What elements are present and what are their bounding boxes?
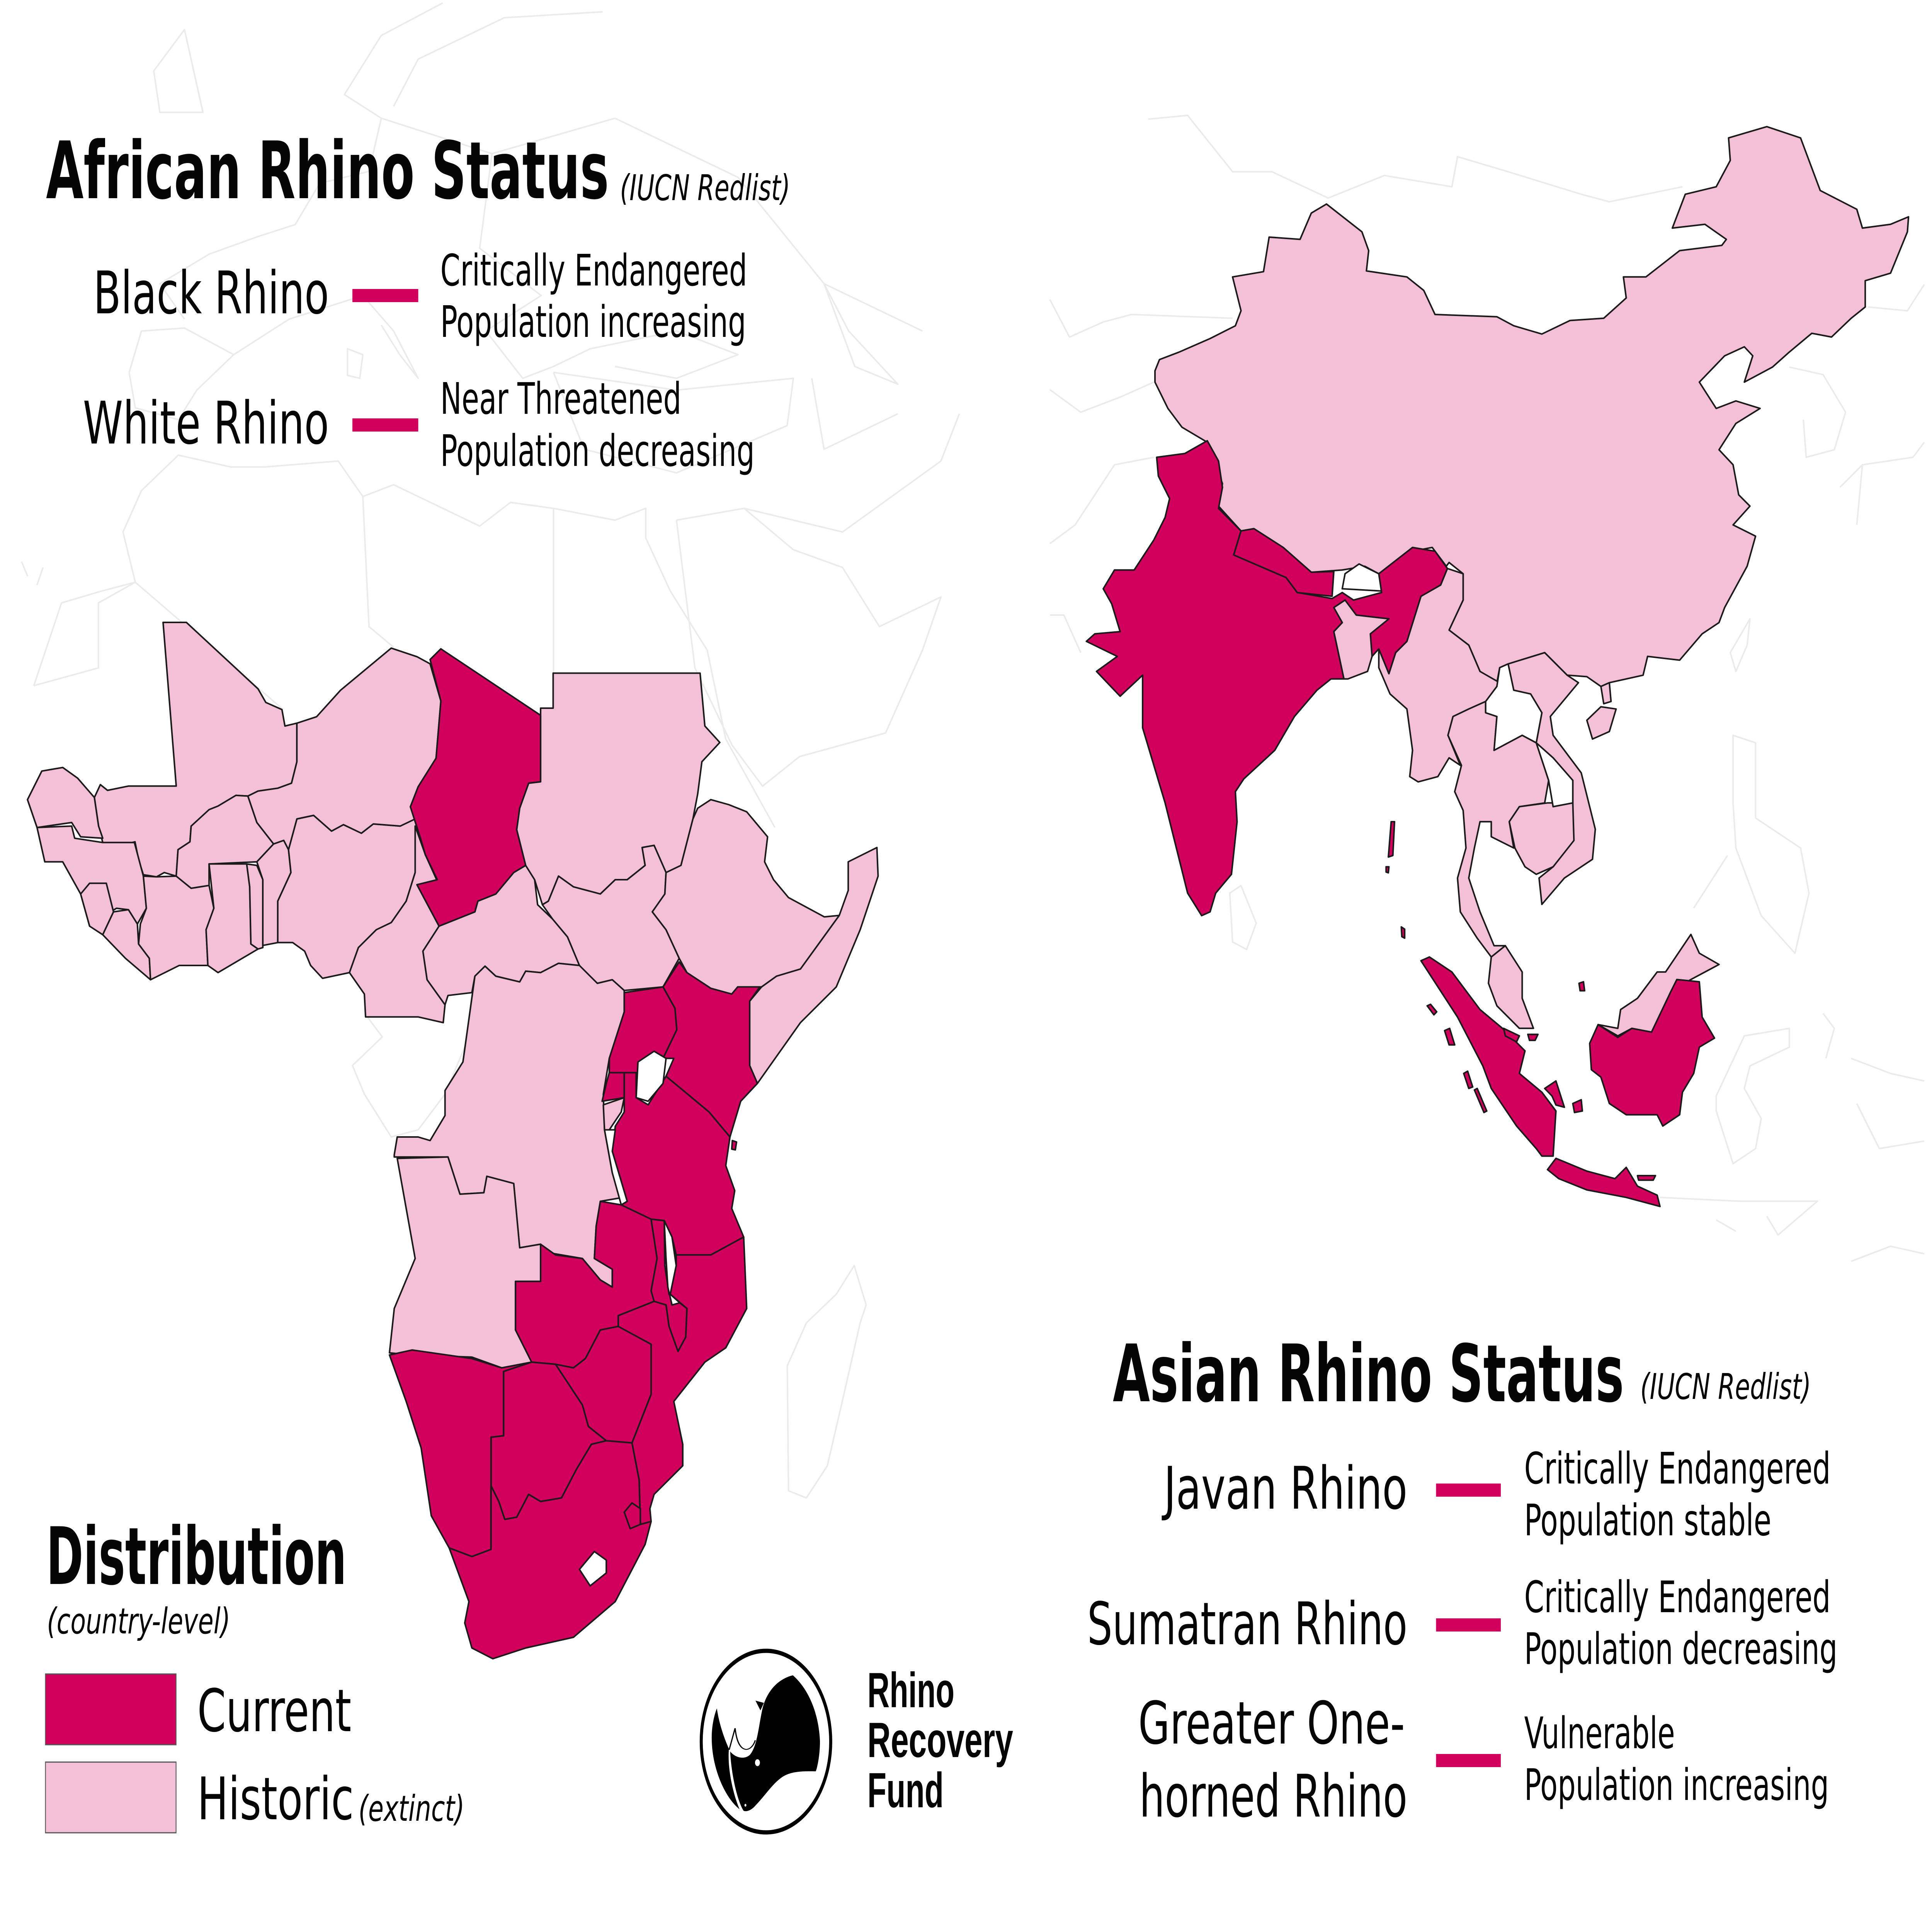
Black Rhino status: Black Rhino bbox=[94, 259, 329, 328]
logo wordmark bbox=[867, 1662, 1013, 1818]
White Rhino status: Population decreasing bbox=[440, 426, 755, 476]
Black Rhino status: Population increasing bbox=[440, 297, 746, 347]
historic range countries bbox=[1155, 127, 1908, 1036]
Javan Rhino status: Critically Endangered bbox=[1524, 1443, 1831, 1494]
logo: Rhino Recovery Fund bbox=[701, 1651, 1013, 1832]
Greater One-horned Rhino status: horned Rhino bbox=[1139, 1762, 1407, 1831]
legend: Distribution: Distribution bbox=[46, 1511, 347, 1603]
Sumatran Rhino status bbox=[1087, 1572, 1837, 1674]
Laos and Bhutan (no data) bbox=[1342, 564, 1573, 807]
logo wordmark: Rhino bbox=[867, 1662, 954, 1718]
title: Asian Rhino Status: Asian Rhino Status bbox=[1113, 1328, 1624, 1420]
Greater One-horned Rhino status: Vulnerable bbox=[1524, 1708, 1675, 1758]
logo wordmark: Recovery bbox=[867, 1712, 1013, 1768]
Greater One-horned Rhino status bbox=[1138, 1689, 1829, 1831]
legend: Distribution: (country-level) bbox=[47, 1601, 230, 1642]
legend: Distribution: (extinct) bbox=[359, 1788, 464, 1829]
current range countries bbox=[389, 649, 760, 1659]
legend: African rhino status bbox=[83, 245, 755, 476]
title: Asian Rhino Status: (IUCN Redlist) bbox=[1640, 1366, 1811, 1407]
Black Rhino status: Critically Endangered bbox=[440, 245, 747, 296]
legend: Asian rhino status bbox=[1087, 1443, 1837, 1831]
Sumatran Rhino status: Critically Endangered bbox=[1524, 1572, 1831, 1622]
Javan Rhino status bbox=[1162, 1443, 1831, 1545]
title: African Rhino Status: African Rhino Status bbox=[46, 125, 609, 217]
map: Asia rhino distribution bbox=[1087, 127, 1908, 1207]
faint background world map bbox=[22, 3, 1924, 1498]
lakes and enclaves bbox=[580, 1051, 680, 1586]
legend: Distribution: Current bbox=[197, 1677, 351, 1745]
map: Africa rhino distribution bbox=[27, 622, 878, 1659]
Sumatran Rhino status: Sumatran Rhino bbox=[1087, 1590, 1407, 1659]
White Rhino status bbox=[83, 374, 755, 476]
Javan Rhino status: Javan Rhino bbox=[1162, 1455, 1407, 1523]
logo wordmark: Fund bbox=[867, 1762, 944, 1818]
Greater One-horned Rhino status: Greater One- bbox=[1138, 1689, 1405, 1758]
Greater One-horned Rhino status: Population increasing bbox=[1524, 1760, 1829, 1810]
legend: Distribution: Historic bbox=[197, 1765, 354, 1834]
Javan Rhino status: Population stable bbox=[1524, 1495, 1771, 1545]
Black Rhino status bbox=[94, 245, 747, 347]
current range countries bbox=[1087, 441, 1714, 1207]
Sumatran Rhino status: Population decreasing bbox=[1524, 1624, 1837, 1674]
title: African Rhino Status: (IUCN Redlist) bbox=[620, 167, 790, 209]
historic range countries bbox=[27, 622, 878, 1368]
legend: Distribution bbox=[46, 1511, 464, 1834]
White Rhino status: White Rhino bbox=[83, 389, 329, 458]
White Rhino status: Near Threatened bbox=[440, 374, 681, 424]
icon: rhino head in circle bbox=[701, 1651, 831, 1832]
